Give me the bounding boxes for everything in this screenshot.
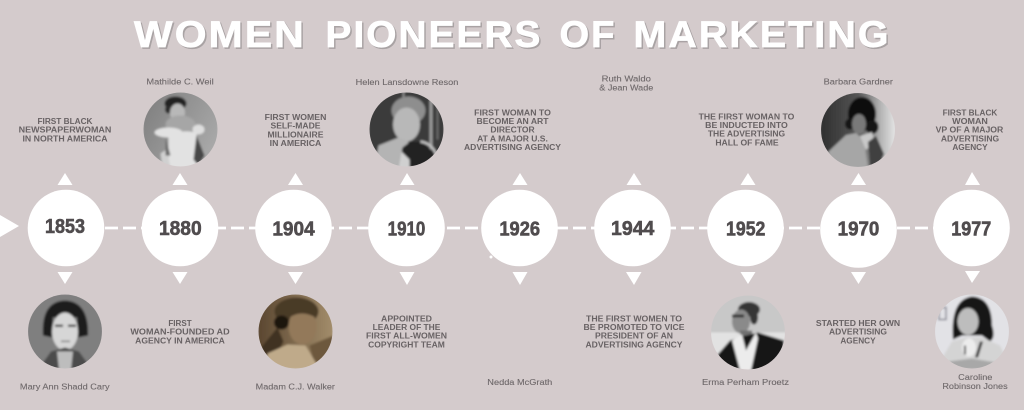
title: OF	[560, 14, 616, 55]
portrait: Mathilde C. Weil	[142, 92, 218, 168]
description: 1853: NEWSPAPERWOMAN	[19, 125, 111, 135]
description: 1944: ADVERTISING AGENCY	[586, 340, 683, 350]
title: WOMEN	[134, 14, 306, 55]
description: 1880	[130, 318, 230, 345]
description: 1977: ADVERTISING	[941, 133, 999, 143]
title: MARKETING	[634, 14, 890, 55]
description: 1910: LEADER OF THE	[373, 322, 441, 332]
description: 1970: AGENCY	[840, 335, 876, 345]
description: 1926	[464, 107, 561, 152]
description: 1904	[265, 112, 326, 148]
title: PIONEERS	[327, 16, 544, 56]
name: Caroline Robinson Jones: Robinson Jones	[942, 381, 1008, 391]
description: 1977: FIRST BLACK	[943, 107, 998, 117]
description: 1904: FIRST WOMEN	[265, 112, 326, 122]
year 1853: 1853	[45, 216, 85, 238]
name: Nedda McGrath: Nedda McGrath	[487, 377, 552, 387]
year 1926: 1926	[499, 218, 540, 240]
year 1904	[255, 190, 332, 266]
description: 1944: THE FIRST WOMEN TO	[586, 313, 682, 323]
year 1944: 1944	[611, 218, 655, 240]
description: 1904: MILLIONAIRE	[268, 129, 324, 139]
portrait: Mary Ann Shadd Cary	[27, 294, 103, 370]
portrait: Erma Perham Proetz	[710, 294, 786, 370]
description: 1926: AT A MAJOR U.S.	[477, 133, 548, 143]
year 1952	[707, 190, 784, 266]
description: 1880: AGENCY IN AMERICA	[135, 335, 226, 345]
description: 1977: AGENCY	[952, 142, 988, 152]
description: 1910: FIRST ALL-WOMEN	[366, 331, 447, 341]
description: 1926: DIRECTOR	[490, 125, 535, 135]
description: 1910: COPYRIGHT TEAM	[368, 340, 445, 350]
name: Ruth Waldo and Jean Wade	[599, 74, 653, 92]
description: 1970: ADVERTISING	[829, 327, 887, 337]
description: 1880: FIRST	[168, 318, 192, 328]
portrait: Helen Lansdowne Reson	[368, 92, 444, 168]
description: 1944: PRESIDENT OF AN	[595, 331, 673, 341]
description: 1904: SELF-MADE	[270, 121, 321, 131]
description: 1977	[936, 107, 1004, 152]
year 1977	[933, 190, 1010, 266]
timeline dashed line	[105, 227, 935, 229]
name: Mathilde C. Weil: Mathilde C. Weil	[146, 77, 214, 87]
year 1970: 1970	[838, 218, 879, 240]
title: PIONEERS	[326, 14, 542, 55]
description: 1977: WOMAN	[952, 116, 988, 126]
title: OF	[561, 16, 618, 56]
year 1880	[142, 190, 218, 266]
name: Caroline Robinson Jones	[942, 372, 1008, 391]
description: 1880: WOMAN-FOUNDED AD	[130, 327, 230, 337]
start arrow	[0, 215, 19, 237]
description: 1952	[699, 111, 795, 148]
title: MARKETING	[635, 16, 892, 56]
year 1904: 1904	[272, 218, 315, 240]
description: 1952: HALL OF FAME	[715, 138, 779, 148]
name: Erma Perham Proetz: Erma Perham Proetz	[702, 377, 789, 387]
description: 1952: BE INDUCTED INTO	[705, 120, 788, 130]
description: 1970: STARTED HER OWN	[816, 318, 900, 328]
year 1977: 1977	[951, 218, 991, 240]
year 1952: 1952	[726, 218, 765, 240]
year 1880: 1880	[159, 218, 202, 240]
name: Caroline Robinson Jones: Caroline	[958, 372, 993, 382]
description: 1952: THE FIRST WOMAN TO	[699, 111, 795, 121]
description: 1904: IN AMERICA	[270, 138, 322, 148]
title: WOMEN	[136, 16, 308, 56]
portrait: Caroline Robinson Jones	[934, 294, 1010, 370]
description: 1910	[366, 313, 447, 350]
description: 1853: IN NORTH AMERICA	[22, 133, 108, 143]
name: Ruth Waldo and Jean Wade: & Jean Wade	[599, 82, 653, 92]
portrait: Barbara Gardner	[820, 92, 896, 168]
description: 1952: THE ADVERTISING	[708, 129, 785, 139]
description: 1926: ADVERTISING AGENCY	[464, 142, 561, 152]
description: 1910: APPOINTED	[381, 313, 432, 323]
year 1910	[368, 190, 445, 266]
year 1926	[481, 190, 558, 266]
year 1910: 1910	[388, 218, 425, 240]
small dot	[490, 256, 492, 258]
description: 1853	[19, 116, 111, 143]
year 1970	[820, 191, 897, 268]
description: 1944: BE PROMOTED TO VICE	[584, 322, 685, 332]
name: Barbara Gardner: Barbara Gardner	[824, 77, 893, 87]
portrait: Madam C.J. Walker	[258, 294, 334, 370]
description: 1970	[816, 318, 900, 345]
description: 1977: VP OF A MAJOR	[936, 125, 1004, 135]
year 1853	[28, 190, 104, 266]
name: Mary Ann Shadd Cary: Mary Ann Shadd Cary	[20, 382, 110, 392]
name: Madam C.J. Walker: Madam C.J. Walker	[256, 382, 335, 392]
description: 1853: FIRST BLACK	[38, 116, 93, 126]
title	[134, 14, 892, 56]
up and down arrows	[58, 172, 980, 285]
name: Helen Lansdowne Reson: Helen Lansdowne Reson	[356, 77, 459, 87]
description: 1926: BECOME AN ART	[476, 116, 549, 126]
name: Ruth Waldo and Jean Wade: Ruth Waldo	[602, 74, 651, 84]
description: 1926: FIRST WOMAN TO	[474, 107, 551, 117]
description: 1944	[584, 313, 685, 350]
year 1944	[594, 190, 671, 266]
